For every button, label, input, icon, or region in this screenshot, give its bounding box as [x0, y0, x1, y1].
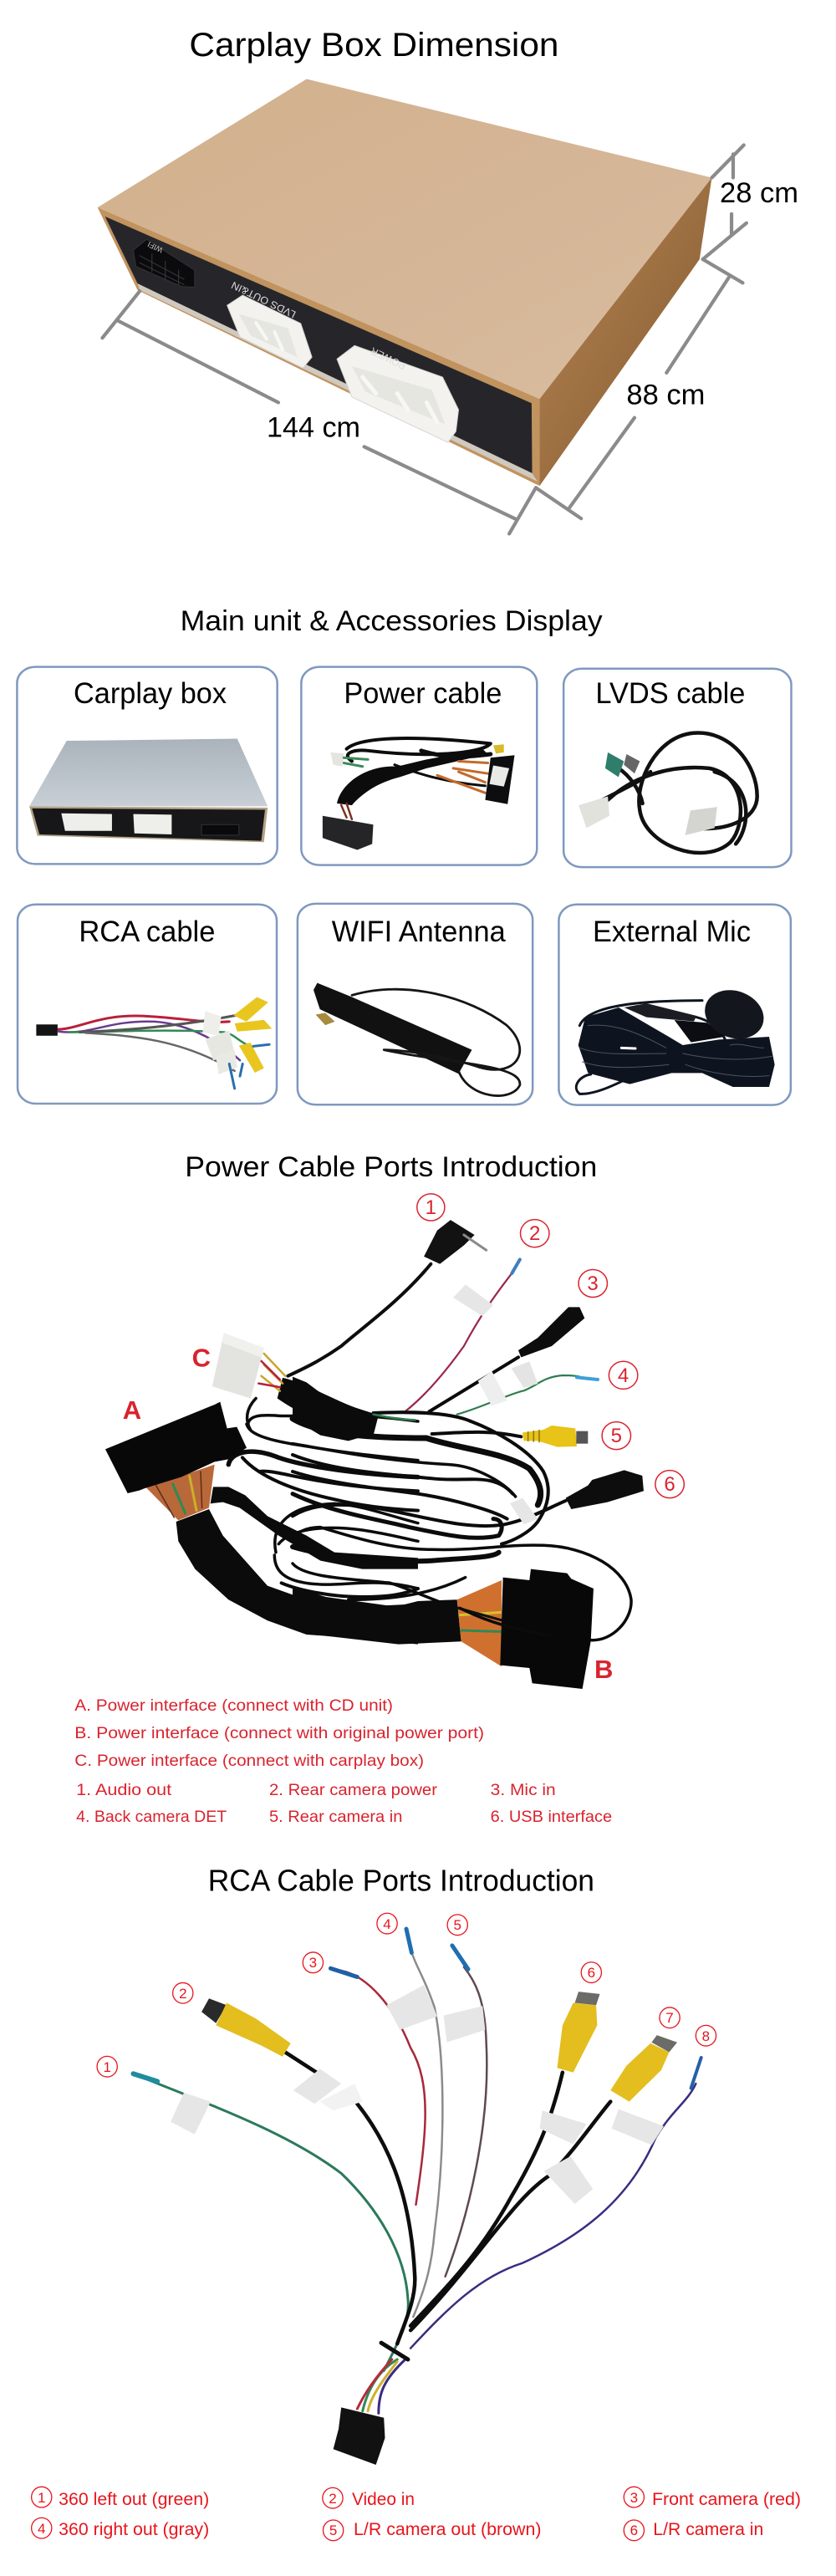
- legend: RCA ports: 5: [329, 2522, 337, 2538]
- number rings: [417, 1194, 684, 1498]
- panel: external mic: [558, 905, 791, 1105]
- panel label: External Mic: External Mic: [593, 916, 751, 948]
- box front frame: [98, 207, 539, 486]
- section: RCA cable ports: [32, 1863, 801, 2541]
- connector B: [500, 1569, 594, 1689]
- heading: RCA Cable Ports Introduction: RCA Cable Ports Introduction: [208, 1863, 594, 1898]
- wire numbers: 7: [665, 2010, 674, 2026]
- port numbers: 6: [664, 1473, 675, 1496]
- port numbers: 4: [618, 1365, 629, 1387]
- plug 1: audio jack: [424, 1220, 487, 1264]
- legend: power cable ports: C. Power interface (connect with carplay box): [74, 1752, 424, 1770]
- port numbers: 1: [426, 1196, 436, 1219]
- wire numbers: 2: [179, 1986, 187, 2002]
- legend: RCA ports: 3: [630, 2490, 638, 2506]
- plug 3: mic in: [478, 1307, 584, 1406]
- main sleeve left: [176, 1509, 418, 1645]
- legend: RCA ports: 1: [38, 2490, 45, 2506]
- legend: RCA ports: 360 left out (green): [59, 2490, 209, 2509]
- plug 6: USB: [510, 1470, 644, 1524]
- connector C: [212, 1333, 285, 1398]
- section: main unit and accessories: [17, 605, 791, 1105]
- legend: power cable ports: 2. Rear camera power: [269, 1782, 438, 1799]
- wire numbers: 6: [588, 1965, 595, 1981]
- legend: power cable ports: 4. Back camera DET: [76, 1808, 227, 1826]
- letter B: B: [594, 1655, 613, 1684]
- dimension: height: 28 cm: [720, 177, 798, 209]
- panel label: WIFI Antenna: WIFI Antenna: [332, 916, 506, 948]
- wire numbers: [103, 1916, 710, 2075]
- silver bottom edge: [138, 283, 538, 482]
- plug 2: yellow RCA video in: [201, 1998, 291, 2057]
- panel: WIFI antenna: [298, 904, 533, 1104]
- upper harness: connector C, audio plug, red wire: [212, 1220, 520, 1436]
- heading: Main unit & Accessories Display: Main unit & Accessories Display: [181, 605, 603, 637]
- legend: RCA ports: L/R camera in: [653, 2520, 763, 2539]
- legend: RCA ports: 2: [329, 2491, 337, 2507]
- legend: power cable ports: 6. USB interface: [491, 1808, 612, 1826]
- port: LVDS white connector: [227, 295, 312, 368]
- panel: RCA cable: [18, 905, 277, 1104]
- wire numbers: 3: [309, 1955, 317, 1971]
- letter A: A: [123, 1395, 141, 1425]
- diagram: RCA cable: [32, 1913, 716, 2541]
- panel label: RCA cable: RCA cable: [79, 916, 215, 948]
- connector B wires: [457, 1580, 504, 1666]
- panel label: Power cable: Power cable: [344, 677, 502, 710]
- wire tips: [133, 1929, 701, 2088]
- port label: WIFI: WIFI: [146, 240, 164, 254]
- legend: power cable ports: 1. Audio out: [76, 1782, 172, 1799]
- port: black 16 pin socket: [133, 239, 195, 287]
- plug 5: yellow RCA: [522, 1426, 588, 1447]
- legend: RCA ports: 360 right out (gray): [59, 2520, 209, 2539]
- port numbers: 5: [611, 1425, 622, 1447]
- legend: RCA ports: 4: [38, 2521, 45, 2537]
- wire tags: [171, 1985, 664, 2204]
- legend: RCA ports: 6: [630, 2522, 638, 2538]
- legend: RCA ports: Front camera (red): [652, 2490, 801, 2509]
- number rings: [32, 1913, 716, 2541]
- wire numbers: 1: [103, 2059, 111, 2075]
- port label: POWER: POWER: [369, 344, 408, 372]
- diagram: power cable harness: [105, 1194, 684, 1689]
- harness left half: connector A and sleeve: [105, 1402, 418, 1645]
- box right side face: [539, 178, 711, 486]
- wire numbers: 5: [453, 1917, 461, 1933]
- harness right half: plugs and connector B: [293, 1307, 644, 1689]
- legend: power cable ports: [74, 1697, 612, 1826]
- section: power cable ports: [74, 1151, 684, 1826]
- wire numbers: 4: [383, 1916, 391, 1932]
- RCA wires: [146, 1949, 696, 2413]
- dimension: width: 144 cm: [267, 412, 360, 444]
- dimension: depth: 88 cm: [626, 380, 705, 411]
- wire numbers: 8: [702, 2028, 710, 2044]
- letter C: C: [192, 1343, 211, 1373]
- plug 7: yellow RCA: [610, 2035, 677, 2102]
- connector A: [105, 1402, 247, 1493]
- panel frames and product pictures: [17, 667, 791, 1104]
- heading: Power Cable Ports Introduction: Power Cable Ports Introduction: [185, 1151, 597, 1183]
- connector A wires: [146, 1465, 215, 1520]
- legend: RCA ports: L/R camera out (brown): [354, 2520, 542, 2539]
- main sleeve right: [293, 1587, 461, 1645]
- legend: power cable ports: B. Power interface (connect with original power port): [74, 1725, 484, 1742]
- wire 4: back camera DET: [374, 1375, 598, 1420]
- section: carplay box dimension: [98, 27, 798, 533]
- panel label: LVDS cable: LVDS cable: [595, 677, 745, 710]
- dark front panel: [105, 217, 533, 473]
- legend: power cable ports: 3. Mic in: [491, 1782, 556, 1799]
- dimension lines: [102, 145, 747, 533]
- panel label: Carplay box: Carplay box: [74, 677, 227, 710]
- box top face: [98, 79, 711, 399]
- port numbers: 3: [587, 1273, 599, 1295]
- legend: RCA ports: [38, 2490, 801, 2539]
- port numbers: 2: [529, 1222, 540, 1245]
- port label: LVDS OUT&IN: LVDS OUT&IN: [229, 279, 298, 320]
- mic cable bundle and head: [576, 982, 775, 1094]
- panel: power cable: [301, 667, 537, 865]
- legend: power cable ports: 5. Rear camera in: [269, 1808, 402, 1826]
- legend: RCA ports: Video in: [352, 2490, 415, 2509]
- port numbers: [426, 1196, 675, 1496]
- panel: LVDS cable: [563, 669, 791, 867]
- port: power white connector: [337, 345, 459, 442]
- panel: carplay box: [17, 667, 278, 864]
- wire 2: rear camera power: [405, 1259, 520, 1411]
- black bottom connector: [334, 2407, 385, 2465]
- product photo: gold carplay box: [98, 79, 747, 533]
- plug 6: yellow RCA: [558, 1992, 600, 2073]
- legend: power cable ports: A. Power interface (connect with CD unit): [74, 1697, 393, 1715]
- title: Carplay Box Dimension: Carplay Box Dimension: [189, 27, 558, 64]
